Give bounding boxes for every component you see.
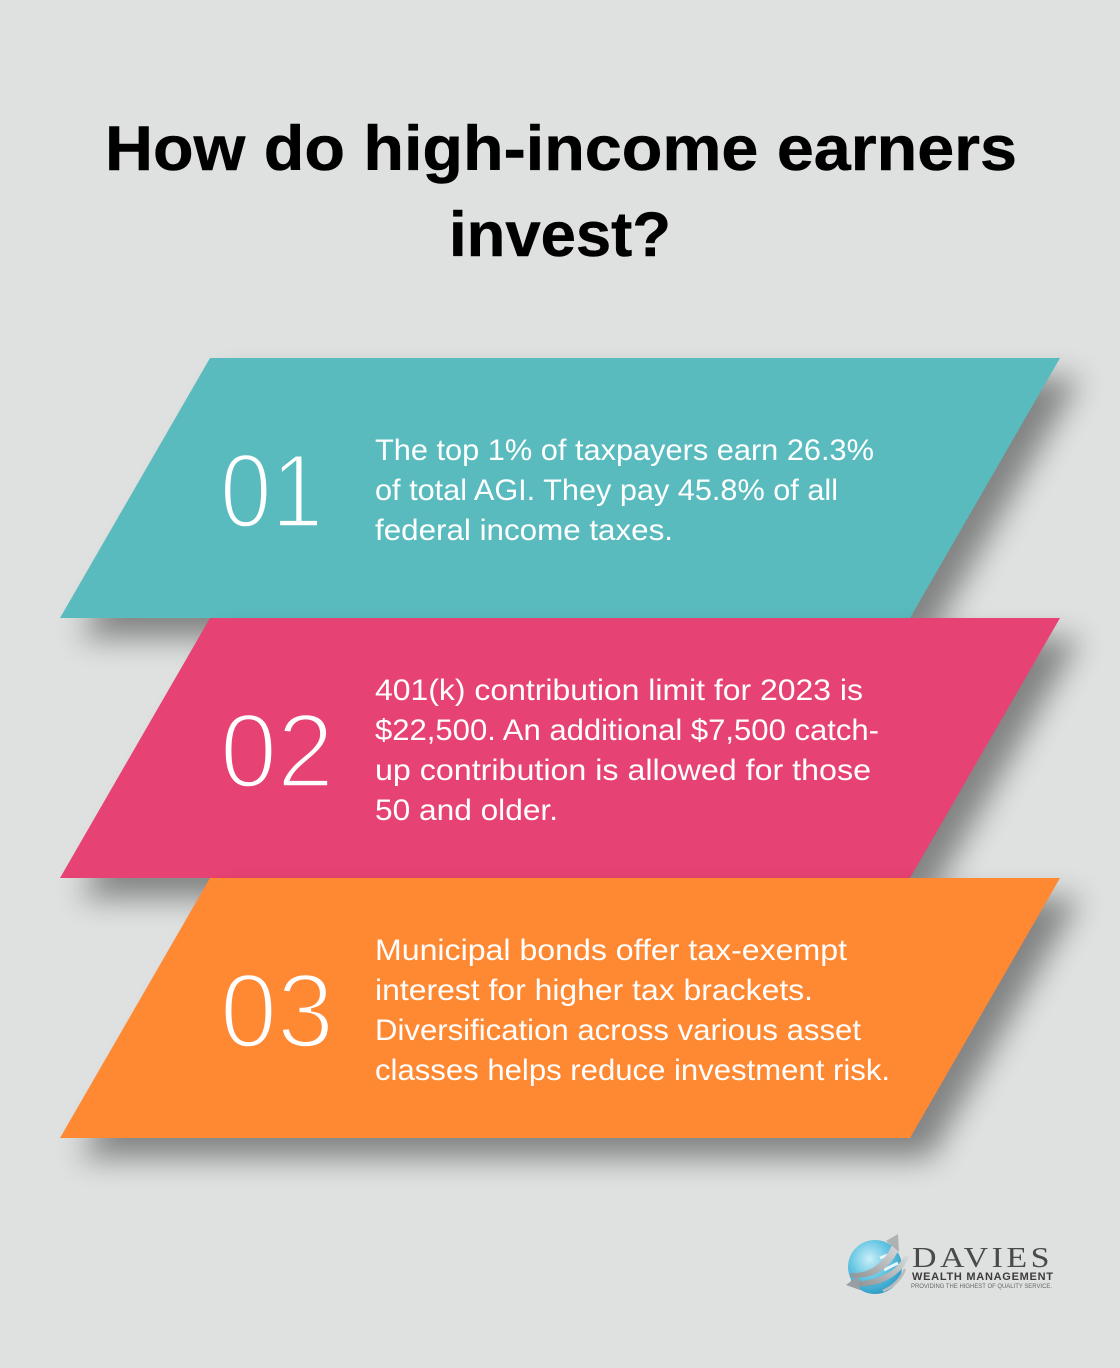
text: step 01: of total AGI. They pay 45.8% of all xyxy=(375,474,838,507)
text: step 02: 50 and older. xyxy=(375,794,558,827)
icon: globe with arrows xyxy=(846,1234,909,1294)
text: step 03: classes helps reduce investment risk. xyxy=(375,1054,890,1087)
text: step 02: 401(k) contribution limit for 2023 is xyxy=(375,674,863,707)
text: step 01 xyxy=(375,434,874,547)
text: step 03: Municipal bonds offer tax-exempt xyxy=(375,934,848,967)
title: invest? xyxy=(449,200,671,270)
text: step 03: interest for higher tax brackets. xyxy=(375,974,813,1007)
title: How do high-income earners xyxy=(105,114,1017,184)
panel: step 03 xyxy=(60,878,1060,1138)
text: step 02: $22,500. An additional $7,500 catch- xyxy=(375,714,879,747)
number 01: 01 xyxy=(220,433,323,550)
logo tagline: PROVIDING THE HIGHEST OF QUALITY SERVICE. xyxy=(911,1283,1052,1290)
panel: step 01 xyxy=(60,358,1060,618)
text: step 03 xyxy=(375,934,890,1087)
logo: Davies Wealth Management xyxy=(846,1234,1053,1294)
text: step 03: Diversification across various asset xyxy=(375,1014,862,1047)
text: step 01: federal income taxes. xyxy=(375,514,673,547)
text: step 01: The top 1% of taxpayers earn 26.3% xyxy=(375,434,874,467)
pink parallelogram xyxy=(60,618,1060,878)
logo subtitle: WEALTH MANAGEMENT xyxy=(912,1271,1053,1283)
number 03: 03 xyxy=(220,953,334,1070)
number 02: 02 xyxy=(220,693,334,810)
text: step 02 xyxy=(375,674,879,827)
panel: step 02 xyxy=(60,618,1060,878)
logo wordmark: DAVIES xyxy=(912,1242,1053,1274)
orange parallelogram xyxy=(60,878,1060,1138)
text: step 02: up contribution is allowed for those xyxy=(375,754,871,787)
title xyxy=(105,114,1017,270)
teal parallelogram xyxy=(60,358,1060,618)
